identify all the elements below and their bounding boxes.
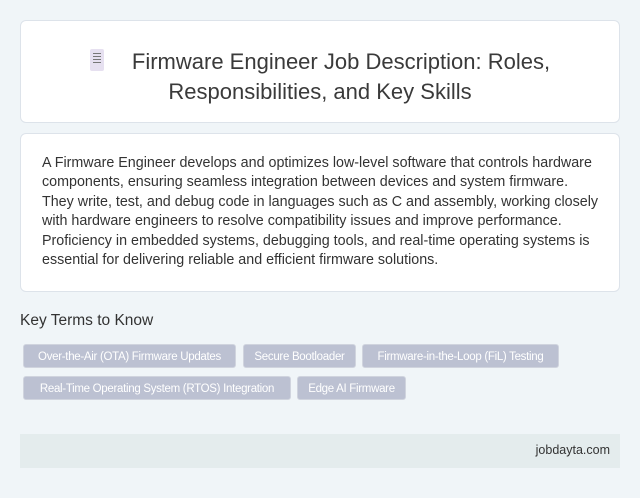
description text: components, ensuring seamless integration between devices and system firmware. (42, 174, 568, 190)
description card (20, 133, 620, 292)
tag 2: Secure Bootloader (254, 351, 345, 363)
tag 1: Over-the-Air (OTA) Firmware Updates (38, 351, 221, 363)
tag 1 (23, 344, 236, 368)
title: Responsibilities, and Key Skills (168, 79, 472, 104)
description text: essential for delivering reliable and efficient firmware solutions. (42, 252, 438, 268)
tag 5: Edge AI Firmware (308, 383, 395, 395)
tag 2 (243, 344, 356, 368)
footer text: jobdayta.com (536, 443, 610, 457)
description text: A Firmware Engineer develops and optimizes low-level software that controls hardware (42, 155, 592, 171)
icon: document (90, 49, 104, 71)
footer (20, 434, 620, 468)
tag 3: Firmware-in-the-Loop (FiL) Testing (378, 351, 543, 363)
key terms heading: Key Terms to Know (20, 312, 153, 329)
tag 4 (23, 376, 291, 400)
description text: They write, test, and debug code in languages such as C and assembly, working closely (42, 194, 598, 210)
tag 3 (362, 344, 559, 368)
title (90, 49, 550, 104)
tag 5 (297, 376, 406, 400)
description text: Proficiency in embedded systems, debugging tools, and real-time operating systems is (42, 233, 590, 249)
title: Firmware Engineer Job Description: Roles, (132, 49, 550, 74)
header card (20, 20, 620, 123)
description text: with hardware engineers to resolve compatibility issues and improve performance. (42, 213, 562, 229)
description text (42, 155, 598, 268)
tag 4: Real-Time Operating System (RTOS) Integration (40, 383, 274, 395)
